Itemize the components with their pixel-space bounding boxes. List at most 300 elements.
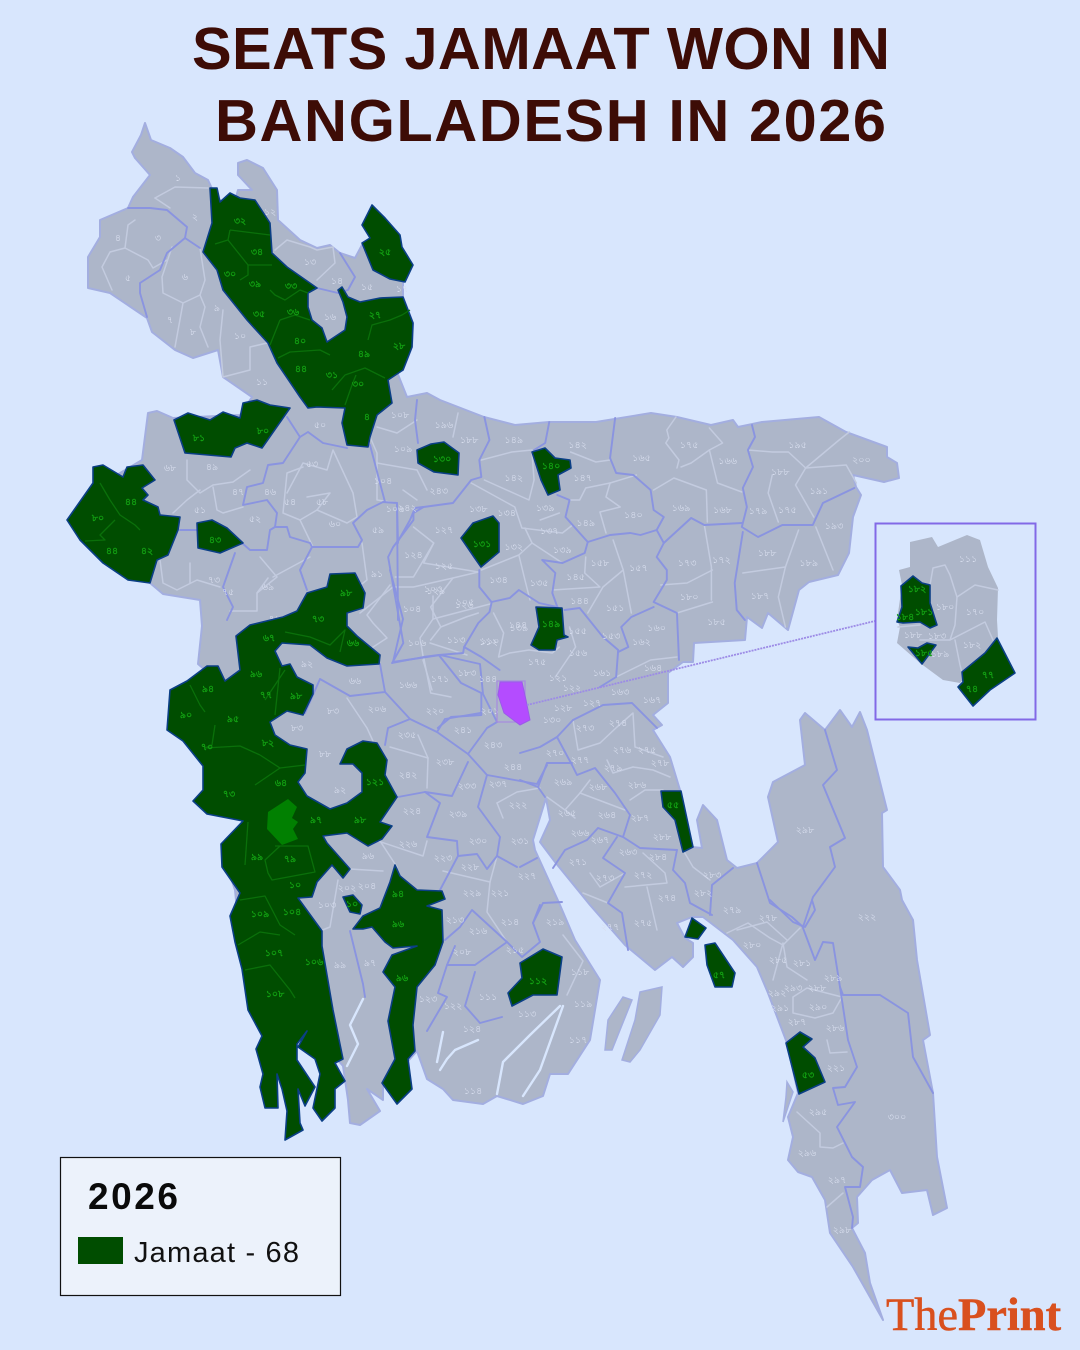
seat numbers: west and south: ৮৩ bbox=[291, 723, 304, 734]
seat numbers: west and south: ১২৭ bbox=[583, 698, 601, 709]
light green seat bbox=[267, 799, 298, 845]
seat numbers: west and south: ২২২ bbox=[858, 912, 876, 923]
seat numbers: west and south: ১৩ bbox=[304, 257, 317, 268]
green seat numbers: ১০ bbox=[346, 899, 358, 910]
seat numbers: west and south: ১১৯ bbox=[574, 999, 592, 1010]
seat numbers: west and south: ২২৮ bbox=[461, 862, 480, 873]
seat numbers: north east: ১৩৯ bbox=[553, 545, 572, 556]
green seat numbers: ৯৬ bbox=[250, 669, 263, 680]
seat numbers: west and south: ২৯৮ bbox=[796, 825, 815, 836]
seat numbers: north east: ১৩৯ bbox=[509, 623, 528, 634]
seat numbers: north east: ১৪৭ bbox=[573, 473, 592, 484]
seat numbers: west and south: ২৪১ bbox=[454, 725, 472, 736]
seat numbers: north east: ১৮৭ bbox=[751, 591, 769, 602]
seat numbers: west and south: ২৪২ bbox=[399, 770, 417, 781]
green seat numbers: ২৮ bbox=[393, 341, 406, 352]
seat numbers: north east: ১৩৮ bbox=[469, 504, 488, 515]
seat numbers: west and south: ১১১ bbox=[479, 992, 497, 1003]
green seat numbers: ৭৩ bbox=[223, 789, 236, 800]
seat numbers: west and south: ৯১ bbox=[371, 569, 383, 580]
seat numbers: west and south: ২০২ bbox=[338, 883, 356, 894]
seat numbers: west and south: ২৮৮ bbox=[808, 983, 827, 994]
green seat numbers: ৩০ bbox=[352, 379, 364, 390]
seat numbers: west and south: ৯২ bbox=[334, 785, 346, 796]
seat numbers: west and south: ১২৮ bbox=[554, 703, 573, 714]
seat numbers: west and south: ১৭১ bbox=[431, 674, 449, 685]
seat numbers: west and south: ১২ bbox=[264, 207, 276, 218]
seat numbers: west and south: ২৯৭ bbox=[828, 1175, 846, 1186]
green seat numbers: ১০ bbox=[289, 880, 301, 891]
seat numbers: west and south: ১১৩ bbox=[518, 1009, 537, 1020]
green seat numbers: ৯৬ bbox=[392, 919, 405, 930]
seat numbers: west and south: ২৩৯ bbox=[449, 809, 467, 820]
seat numbers: west and south: ১ bbox=[175, 173, 181, 184]
green seat numbers: ১৩১ bbox=[473, 539, 491, 550]
green seat numbers: ৭৯ bbox=[284, 854, 296, 865]
seat numbers: north east: ১২৪ bbox=[404, 550, 423, 561]
seat numbers: west and south: ২৭৪ bbox=[658, 893, 676, 904]
legend: Jamaat - 68 bbox=[134, 1237, 299, 1269]
seat numbers: west and south: ৫৩ bbox=[306, 459, 319, 470]
seat numbers: north east: ১৪৯ bbox=[504, 435, 523, 446]
seat numbers: west and south: ১১৭ bbox=[569, 1035, 587, 1046]
seat numbers: west and south: ১০৯ bbox=[394, 444, 412, 455]
green seat numbers: ৪২ bbox=[141, 546, 153, 557]
inset: Dhaka detail: ৭৭ bbox=[982, 670, 994, 681]
seat numbers: west and south: ২৮৩ bbox=[703, 870, 722, 881]
legend swatch bbox=[78, 1237, 123, 1264]
seat numbers: north east: ১১৩ bbox=[447, 635, 466, 646]
seat numbers: north east: ১৯৬ bbox=[434, 420, 454, 431]
seat numbers: west and south: ২৭৯ bbox=[604, 763, 622, 774]
green seat numbers: ১০৯ bbox=[251, 909, 269, 920]
seat numbers: west and south: ২৯৩ bbox=[784, 983, 803, 994]
seat numbers: west and south: ২২৭ bbox=[518, 871, 536, 882]
seat numbers: west and south: ২৮৯ bbox=[824, 973, 842, 984]
seat numbers: north east: ১৮৮ bbox=[771, 467, 790, 478]
seat numbers: west and south: ১২২ bbox=[563, 683, 581, 694]
seat numbers: west and south: ২৮৬ bbox=[628, 780, 647, 791]
seat numbers: north east: ১৯১ bbox=[809, 486, 828, 497]
map: Bangladesh constituencies bbox=[67, 123, 947, 1320]
green seat numbers: ১০৮ bbox=[266, 989, 285, 1000]
seat numbers: west and south: ২২১ bbox=[491, 888, 509, 899]
green seat numbers: ১৪০ bbox=[542, 461, 560, 472]
seat numbers: north east: ১৬০ bbox=[647, 623, 666, 634]
green seat numbers: ৮০ bbox=[256, 426, 269, 437]
Jamaat seat: east 1 bbox=[661, 791, 693, 852]
green seat numbers: ২৫ bbox=[379, 247, 391, 258]
green seat numbers: ৫৩ bbox=[802, 1070, 815, 1081]
seat numbers: west and south: ২৮৮ bbox=[653, 832, 672, 843]
green seat numbers: ৬৪ bbox=[275, 778, 287, 789]
seat numbers: west and south: ২৬৫ bbox=[558, 808, 576, 819]
Jamaat seat: east 2 bbox=[685, 918, 706, 939]
Dhaka highlight bbox=[497, 681, 530, 725]
green seat numbers: ৩০ bbox=[224, 269, 236, 280]
green seat numbers: ৪৪ bbox=[106, 546, 118, 557]
seat numbers: west and south: ২১৩ bbox=[446, 915, 465, 926]
seat numbers: west and south: ২৭৩ bbox=[576, 723, 595, 734]
seat numbers: west and south: ১০ bbox=[234, 331, 246, 342]
seat numbers: west and south: ১৭৫ bbox=[528, 657, 546, 668]
seat numbers: west and south: ৭ bbox=[167, 315, 173, 326]
green seat numbers: ৯০ bbox=[180, 710, 192, 721]
seat numbers: west and south bbox=[115, 173, 906, 1236]
Jamaat seats: north west band bbox=[174, 400, 290, 457]
green seat numbers: ৯৮ bbox=[290, 691, 303, 702]
green seat numbers: ৩৫ bbox=[253, 309, 265, 320]
green seat numbers: ৪০ bbox=[294, 336, 306, 347]
green seat numbers: ১১২ bbox=[529, 976, 547, 987]
seat numbers: west and south: ১০৪ bbox=[403, 604, 421, 615]
Jamaat seats: far north bbox=[203, 188, 413, 447]
seat numbers: west and south: ১০৬ bbox=[408, 638, 427, 649]
seat numbers: west and south: ৪৯ bbox=[206, 462, 218, 473]
seat numbers: north east: ২০০ bbox=[852, 455, 871, 466]
seat numbers: west and south: ৬০ bbox=[329, 519, 341, 530]
seat numbers: west and south: ৪ bbox=[115, 233, 121, 244]
seat numbers: north east: ১৩৫ bbox=[530, 578, 548, 589]
green seat numbers: ১০৬ bbox=[305, 957, 324, 968]
Jamaat seats: north east block bbox=[362, 205, 413, 282]
green seat numbers: ১০৪ bbox=[283, 907, 301, 918]
seat numbers: west and south: ২৩৩ bbox=[458, 781, 477, 792]
green seat numbers: ৩২ bbox=[234, 216, 246, 227]
seat numbers: west and south: ৮৮ bbox=[319, 749, 332, 760]
seat numbers: west and south: ৭১ bbox=[269, 614, 281, 625]
seat numbers: west and south: ৪৭ bbox=[232, 487, 244, 498]
seat numbers: west and south: ৮৩ bbox=[327, 706, 340, 717]
seat numbers: west and south: ৯৬ bbox=[362, 851, 375, 862]
seat numbers: west and south: ২৭৫ bbox=[638, 745, 656, 756]
seat numbers: west and south: ২৭৩ bbox=[596, 873, 615, 884]
title: SEATS JAMAAT WON IN bbox=[192, 15, 890, 82]
seat numbers: west and south: ৬ bbox=[182, 272, 189, 283]
Jamaat seat: central bbox=[531, 607, 568, 650]
seat numbers: north east: ১১২ bbox=[479, 637, 498, 648]
seat numbers: west and south: ৩০০ bbox=[888, 1112, 906, 1123]
seat numbers: west and south: ২৭৫ bbox=[634, 918, 652, 929]
seat numbers: west and south: ২৪৩ bbox=[484, 740, 503, 751]
seat numbers: west and south: ২৬৮ bbox=[589, 782, 608, 793]
seat numbers: west and south: ২৭০ bbox=[546, 748, 564, 759]
seat numbers: west and south: ২৭৪ bbox=[609, 718, 627, 729]
seat numbers: west and south: ১৬৩ bbox=[611, 687, 630, 698]
seat numbers: west and south: ৩ bbox=[155, 233, 162, 244]
seat numbers: west and south: ২৭২ bbox=[634, 870, 652, 881]
seat numbers: west and south: ২৮৭ bbox=[631, 813, 649, 824]
seat numbers: west and south: ২২৪ bbox=[403, 806, 421, 817]
seat numbers: north east: ১৭৩ bbox=[678, 558, 697, 569]
seat numbers: west and south: ২২৬ bbox=[399, 839, 418, 850]
seat numbers: west and south: ৯২ bbox=[301, 659, 313, 670]
green seat numbers: ৫৭ bbox=[713, 970, 725, 981]
seat numbers: north east: ১৮৮ bbox=[758, 548, 777, 559]
seat numbers: west and south: ৫২ bbox=[249, 514, 261, 525]
seat numbers: west and south: ১৬৪ bbox=[644, 663, 662, 674]
green seat numbers: ৬৬ bbox=[347, 638, 360, 649]
seat numbers: west and south: ২৩৫ bbox=[398, 730, 416, 741]
green seat numbers: ৯৮ bbox=[354, 815, 367, 826]
seat numbers: west and south: ১১৮ bbox=[571, 967, 590, 978]
green seat numbers: ১৪৯ bbox=[542, 619, 560, 630]
seat numbers: north east: ১৩২ bbox=[504, 542, 523, 553]
connector line to inset bbox=[527, 621, 875, 705]
green seat numbers: ৩৬ bbox=[287, 307, 300, 318]
seat numbers: west and south: ১৬৬ bbox=[399, 680, 418, 691]
inset: Dhaka detail bbox=[876, 524, 1036, 720]
inset: Dhaka detail: ১৮৫ bbox=[915, 648, 933, 659]
green seat numbers: ৭৭ bbox=[260, 690, 272, 701]
seat numbers: west and south: ২৭৭ bbox=[601, 922, 619, 933]
mainland base shape bbox=[80, 123, 947, 1320]
seat numbers: west and south: ৫ bbox=[125, 273, 131, 284]
seat boundaries: west and south bbox=[102, 187, 847, 1207]
legend: 2026 bbox=[88, 1176, 178, 1217]
seat numbers: west and south: ২৯৫ bbox=[809, 1107, 827, 1118]
seat numbers: west and south: ২৭৮ bbox=[759, 913, 778, 924]
seat numbers: west and south: ৯৭ bbox=[364, 958, 376, 969]
inset: Dhaka detail: ১১১ bbox=[959, 554, 977, 565]
green seat numbers: ৫৫ bbox=[667, 800, 679, 811]
green seat numbers: ১০৭ bbox=[265, 948, 283, 959]
Jamaat seat: central north 3 bbox=[461, 516, 499, 567]
seat numbers: west and south: ২৬৩ bbox=[619, 847, 638, 858]
seat numbers: west and south: ২৮১ bbox=[793, 958, 811, 969]
Jamaat seats: west block bbox=[67, 465, 180, 583]
green seat numbers: ৬৭ bbox=[263, 633, 275, 644]
seat numbers: west and south: ২১৪ bbox=[501, 917, 519, 928]
division boundaries: west and south bbox=[128, 208, 933, 1228]
seat numbers: west and south: ১০৩ bbox=[424, 584, 443, 595]
seat numbers: north east: ১৮৯ bbox=[799, 558, 818, 569]
seat numbers: north east: ১৮৮ bbox=[460, 435, 479, 446]
seat numbers: west and south: ১৬ bbox=[324, 312, 337, 323]
seat numbers: west and south: ১৪৪ bbox=[509, 620, 527, 631]
green seat numbers: ৮২ bbox=[261, 738, 274, 749]
green seat numbers: ৩১ bbox=[326, 370, 338, 381]
green seat numbers: ৪৪ bbox=[295, 364, 307, 375]
seat numbers: west and south: ২ bbox=[192, 212, 198, 223]
green seat numbers: ৪৯ bbox=[358, 349, 370, 360]
seat numbers: west and south: ৬৯ bbox=[262, 582, 274, 593]
green seat numbers: ৭০ bbox=[201, 742, 213, 753]
seat numbers: west and south: ৬৬ bbox=[349, 676, 362, 687]
inset: Dhaka detail: ১৭০ bbox=[966, 607, 984, 618]
seat numbers: west and south: ২২৯ bbox=[463, 888, 481, 899]
seat numbers: north east: ১৪৫ bbox=[566, 572, 585, 583]
seat numbers: west and south: ১৫ bbox=[361, 282, 373, 293]
seat numbers: north east: ১৫৩ bbox=[602, 631, 621, 642]
seat numbers: west and south: ২৬৯ bbox=[554, 777, 572, 788]
green seat numbers: ৯৬ bbox=[396, 973, 409, 984]
green seat numbers: ১২১ bbox=[366, 777, 384, 788]
seat numbers: west and south: ২২৩ bbox=[434, 853, 453, 864]
seat numbers: west and south: ১২৩ bbox=[419, 994, 438, 1005]
seat numbers: west and south: ২৩৮ bbox=[436, 757, 455, 768]
seat numbers: west and south: ২৯৮ bbox=[833, 1225, 852, 1236]
green seat numbers: ৮১ bbox=[192, 433, 205, 444]
Jamaat seat: central north 1 bbox=[417, 442, 459, 475]
seat numbers: west and south: ২৩১ bbox=[511, 836, 529, 847]
seat numbers: north east: ১৪২ bbox=[568, 440, 587, 451]
seat numbers: north east: ১৭৯ bbox=[749, 506, 767, 517]
seat numbers: north east: ১৮৫ bbox=[707, 617, 726, 628]
seat numbers: north east: ১২৫ bbox=[434, 561, 453, 572]
green seat numbers: ৪৩ bbox=[209, 535, 222, 546]
seat numbers: west and south: ৫৯ bbox=[372, 525, 384, 536]
river channels bbox=[347, 999, 563, 1096]
title: BANGLADESH IN 2026 bbox=[215, 87, 886, 154]
seat numbers: north east: ১৩৭ bbox=[540, 526, 559, 537]
seat numbers: west and south: ২৬৪ bbox=[598, 810, 616, 821]
inset: Dhaka detail: ১৮১ bbox=[915, 607, 933, 618]
seat numbers: north east: ১৩৪ bbox=[497, 508, 516, 519]
seat numbers: west and south: ১১০ bbox=[481, 636, 499, 647]
seat numbers: north east: ১৫৫ bbox=[568, 626, 587, 637]
seat numbers: west and south: ২৩৭ bbox=[489, 779, 507, 790]
Jamaat seat: small dot bbox=[343, 895, 362, 914]
inset: Dhaka detail: ১৮৮ bbox=[904, 630, 923, 641]
seat numbers: west and south: ৯ bbox=[214, 303, 220, 314]
inset: Dhaka detail: ১৮২ bbox=[908, 584, 926, 595]
seat numbers: west and south: ৭৩ bbox=[208, 575, 221, 586]
seat numbers: west and south: ২৯১ bbox=[771, 1003, 789, 1014]
seat numbers: west and south: ৪৬ bbox=[264, 487, 277, 498]
green seat numbers: ৩৯ bbox=[249, 279, 261, 290]
seat numbers: west and south: ২৮৬ bbox=[826, 1023, 845, 1034]
green seat numbers: ৯৪ bbox=[392, 889, 404, 900]
seat numbers: north east: ১২৯ bbox=[426, 586, 445, 597]
green seat numbers: ৮০ bbox=[91, 513, 104, 524]
seat numbers: north east: ২৪২ bbox=[398, 503, 417, 514]
seat numbers: north east: ১৪৪ bbox=[570, 596, 589, 607]
seat numbers: west and south: ২৮৫ bbox=[769, 955, 787, 966]
inset: Dhaka detail: ১৮০ bbox=[936, 602, 954, 613]
seat numbers: west and south: ২০১ bbox=[481, 706, 499, 717]
seat boundaries: north east bbox=[395, 413, 856, 697]
seat numbers: north east: ১৫৮ bbox=[591, 558, 610, 569]
seat numbers: west and south: ২৮২ bbox=[694, 888, 712, 899]
seat numbers: west and south: ১৭ bbox=[396, 284, 408, 295]
seat numbers: west and south: ২০৪ bbox=[358, 881, 376, 892]
Jamaat seat: south delta bbox=[508, 949, 562, 1006]
seat numbers: west and south: ১০৩ bbox=[318, 900, 337, 911]
seat numbers: west and south: ৮ bbox=[190, 327, 197, 338]
seat numbers: north east: ১৬৯ bbox=[672, 503, 690, 514]
green seat numbers: ৪৪ bbox=[125, 497, 137, 508]
seat numbers: west and south: ২৭৮ bbox=[651, 758, 670, 769]
seat numbers: west and south: ৫৪ bbox=[284, 497, 296, 508]
seat numbers: west and south: ২০৬ bbox=[368, 704, 387, 715]
inset: Dhaka detail: ১৮৯ bbox=[931, 649, 949, 660]
seat numbers: north east: ১৬২ bbox=[632, 637, 651, 648]
seat numbers: north east: ১২৬ bbox=[455, 600, 474, 611]
Jamaat seat: south east bbox=[786, 1032, 825, 1094]
seat numbers: west and south: ২১৯ bbox=[546, 917, 564, 928]
green seat numbers: ৩৪ bbox=[251, 247, 263, 258]
legend bbox=[60, 1158, 340, 1296]
seat numbers: north east: ১৯৩ bbox=[825, 521, 844, 532]
seat numbers: west and south: ১২৪ bbox=[463, 1024, 481, 1035]
seat numbers: west and south: ১৬১ bbox=[593, 668, 611, 679]
seat numbers: west and south: ২০৮ bbox=[453, 947, 472, 958]
seat numbers: west and south: ৫০ bbox=[314, 420, 326, 431]
seat numbers: west and south: ২১৬ bbox=[469, 926, 488, 937]
seat numbers: west and south: ২৭৯ bbox=[723, 905, 741, 916]
seat numbers: west and south: ৫১ bbox=[194, 505, 206, 516]
inset: Dhaka detail: ৭৪ bbox=[966, 684, 978, 695]
seat numbers: west and south: ১১ bbox=[256, 377, 268, 388]
seat numbers: west and south: ৬৮ bbox=[164, 463, 177, 474]
seat numbers: north east: ১৪৯ bbox=[576, 518, 595, 529]
green seat numbers bbox=[91, 216, 815, 1081]
seat numbers: west and south: ১৪ bbox=[331, 276, 343, 287]
seat numbers: west and south: ২৬৬ bbox=[571, 828, 590, 839]
seat numbers: north east: ১৭২ bbox=[712, 555, 731, 566]
Jamaat seats: south central bbox=[353, 865, 445, 1104]
seat numbers: west and south: ২৮৭ bbox=[788, 1017, 806, 1028]
green seat numbers: ৯৯ bbox=[251, 852, 263, 863]
islands bbox=[605, 987, 793, 1122]
seat numbers: north east: ১২৭ bbox=[434, 525, 453, 536]
seat numbers: west and south: ২৮৪ bbox=[649, 852, 667, 863]
seat numbers: north east: ১৭৫ bbox=[778, 505, 797, 516]
seat numbers: west and south: ৫৮ bbox=[316, 497, 329, 508]
green seat numbers: ৩৩ bbox=[285, 281, 298, 292]
seat numbers: west and south: ২৩০ bbox=[469, 836, 487, 847]
seat numbers: north east: ১৩৯ bbox=[536, 503, 555, 514]
green seat numbers: ৯৭ bbox=[310, 815, 322, 826]
seat numbers: west and south: ২৯৬ bbox=[798, 1148, 817, 1159]
seat numbers: west and south: ২২২ bbox=[509, 800, 527, 811]
seat numbers: west and south: ২৭৭ bbox=[571, 755, 589, 766]
green seat numbers: ২৭ bbox=[369, 310, 381, 321]
green seat numbers: ৪ bbox=[364, 412, 370, 423]
seat numbers: west and south: ১৩০ bbox=[543, 715, 561, 726]
seat numbers: west and south: ১০৬ bbox=[386, 504, 405, 515]
inset: Dhaka detail: ১৮৩ bbox=[928, 631, 947, 642]
logo: ThePrint: ThePrint bbox=[886, 1289, 1061, 1341]
seat numbers: north east: ১৯৫ bbox=[788, 440, 807, 451]
seat numbers: west and south: ২৮০ bbox=[743, 940, 761, 951]
seat numbers: west and south: ২৪৪ bbox=[504, 762, 522, 773]
seat numbers: west and south: ২৯২ bbox=[768, 988, 786, 999]
seat numbers: north east bbox=[398, 420, 871, 648]
seat numbers: west and south: ২২০ bbox=[426, 706, 444, 717]
seat numbers: west and south: ১২২ bbox=[444, 1001, 462, 1012]
seat numbers: north east: ১৫১ bbox=[606, 603, 624, 614]
seat numbers: north east: ১৬৫ bbox=[632, 453, 651, 464]
seat numbers: north east: ১৬৮ bbox=[713, 505, 733, 516]
seat numbers: west and south: ২৭১ bbox=[569, 857, 587, 868]
seat numbers: west and south: ৭৫ bbox=[222, 587, 234, 598]
seat numbers: west and south: ২২১ bbox=[827, 1063, 845, 1074]
seat numbers: north east: ১৪২ bbox=[504, 473, 523, 484]
seat numbers: north east: ১৭৫ bbox=[680, 440, 698, 451]
seat numbers: west and south: ১৪৪ bbox=[479, 674, 497, 685]
inset: Dhaka detail: ১৮৪ bbox=[896, 612, 914, 623]
seat numbers: west and south: ১০৮ bbox=[391, 410, 410, 421]
green seat numbers: ৯৮ bbox=[340, 588, 353, 599]
seat numbers: north east: ১৩৪ bbox=[489, 575, 508, 586]
green seat numbers: ৯৫ bbox=[227, 714, 239, 725]
seat numbers: west and south: ১২১ bbox=[549, 673, 567, 684]
seat numbers: west and south: ২১৫ bbox=[506, 945, 524, 956]
Jamaat seats: south west belt bbox=[167, 573, 397, 1140]
seat numbers: west and south: ১১৪ bbox=[464, 1086, 482, 1097]
